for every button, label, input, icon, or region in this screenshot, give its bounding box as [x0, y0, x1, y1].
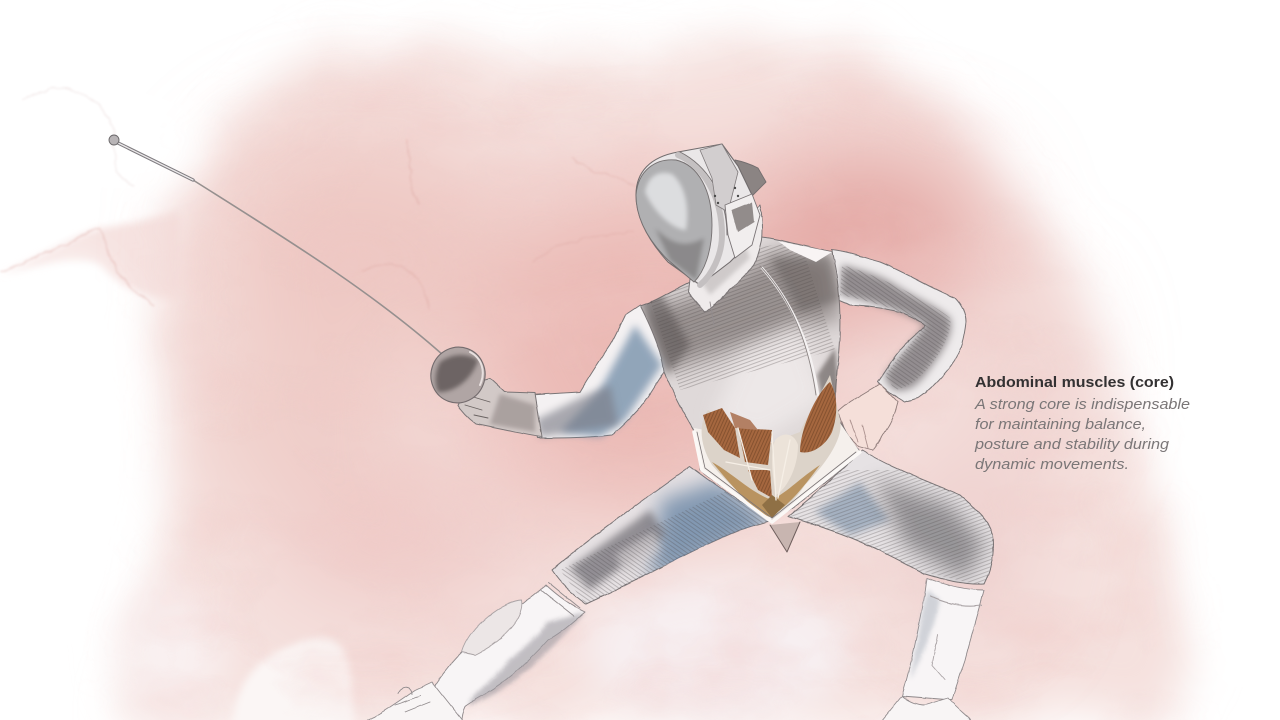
callout body	[974, 396, 1190, 473]
mask: bib	[688, 205, 763, 312]
front lower leg	[430, 582, 585, 720]
wash: streak left	[0, 210, 180, 300]
callout body: dynamic movements.	[975, 456, 1129, 473]
white highlight on collar side	[778, 241, 832, 262]
glove	[458, 378, 542, 437]
mask: side strap	[700, 144, 738, 212]
bell guard	[423, 339, 493, 411]
mask: rim	[678, 155, 722, 285]
front thigh	[552, 466, 772, 604]
foil blade	[109, 135, 443, 355]
fencing mask	[636, 144, 766, 325]
front shoe	[350, 682, 470, 720]
back lower leg	[902, 578, 984, 700]
callout: abdominal muscles	[974, 375, 1190, 473]
callout body: for maintaining balance,	[975, 416, 1146, 433]
wash: faint tide lines	[0, 140, 636, 310]
wash: tonal blotches	[190, 130, 1070, 630]
hand on hip	[838, 384, 898, 450]
callout heading: Abdominal muscles (core)	[975, 375, 1174, 391]
mask: padding	[725, 194, 760, 258]
fencer illustration	[109, 135, 1000, 720]
callout body: posture and stability during	[974, 436, 1170, 453]
mask: strap	[710, 302, 714, 325]
mask: rivets	[714, 187, 739, 204]
jacket torso	[640, 237, 860, 522]
back shoe	[874, 696, 982, 720]
wash: paper texture	[157, 246, 1060, 707]
mask: back flap	[735, 160, 766, 196]
breeches	[552, 450, 1000, 610]
wash: pale stain outline upper left	[22, 88, 135, 185]
callout body: A strong core is indispensable	[974, 396, 1190, 413]
weapon arm	[530, 305, 664, 438]
jacket lower edge	[694, 432, 860, 522]
wash: pale blot	[234, 638, 356, 720]
rear arm	[832, 250, 966, 402]
fly flap	[770, 522, 800, 552]
abdominal muscles	[694, 375, 860, 520]
placket seam	[762, 268, 818, 395]
mask: mesh visor	[636, 160, 712, 282]
wash: main pink stain	[120, 45, 1185, 720]
back thigh	[788, 450, 993, 584]
mask: shell	[636, 144, 758, 285]
